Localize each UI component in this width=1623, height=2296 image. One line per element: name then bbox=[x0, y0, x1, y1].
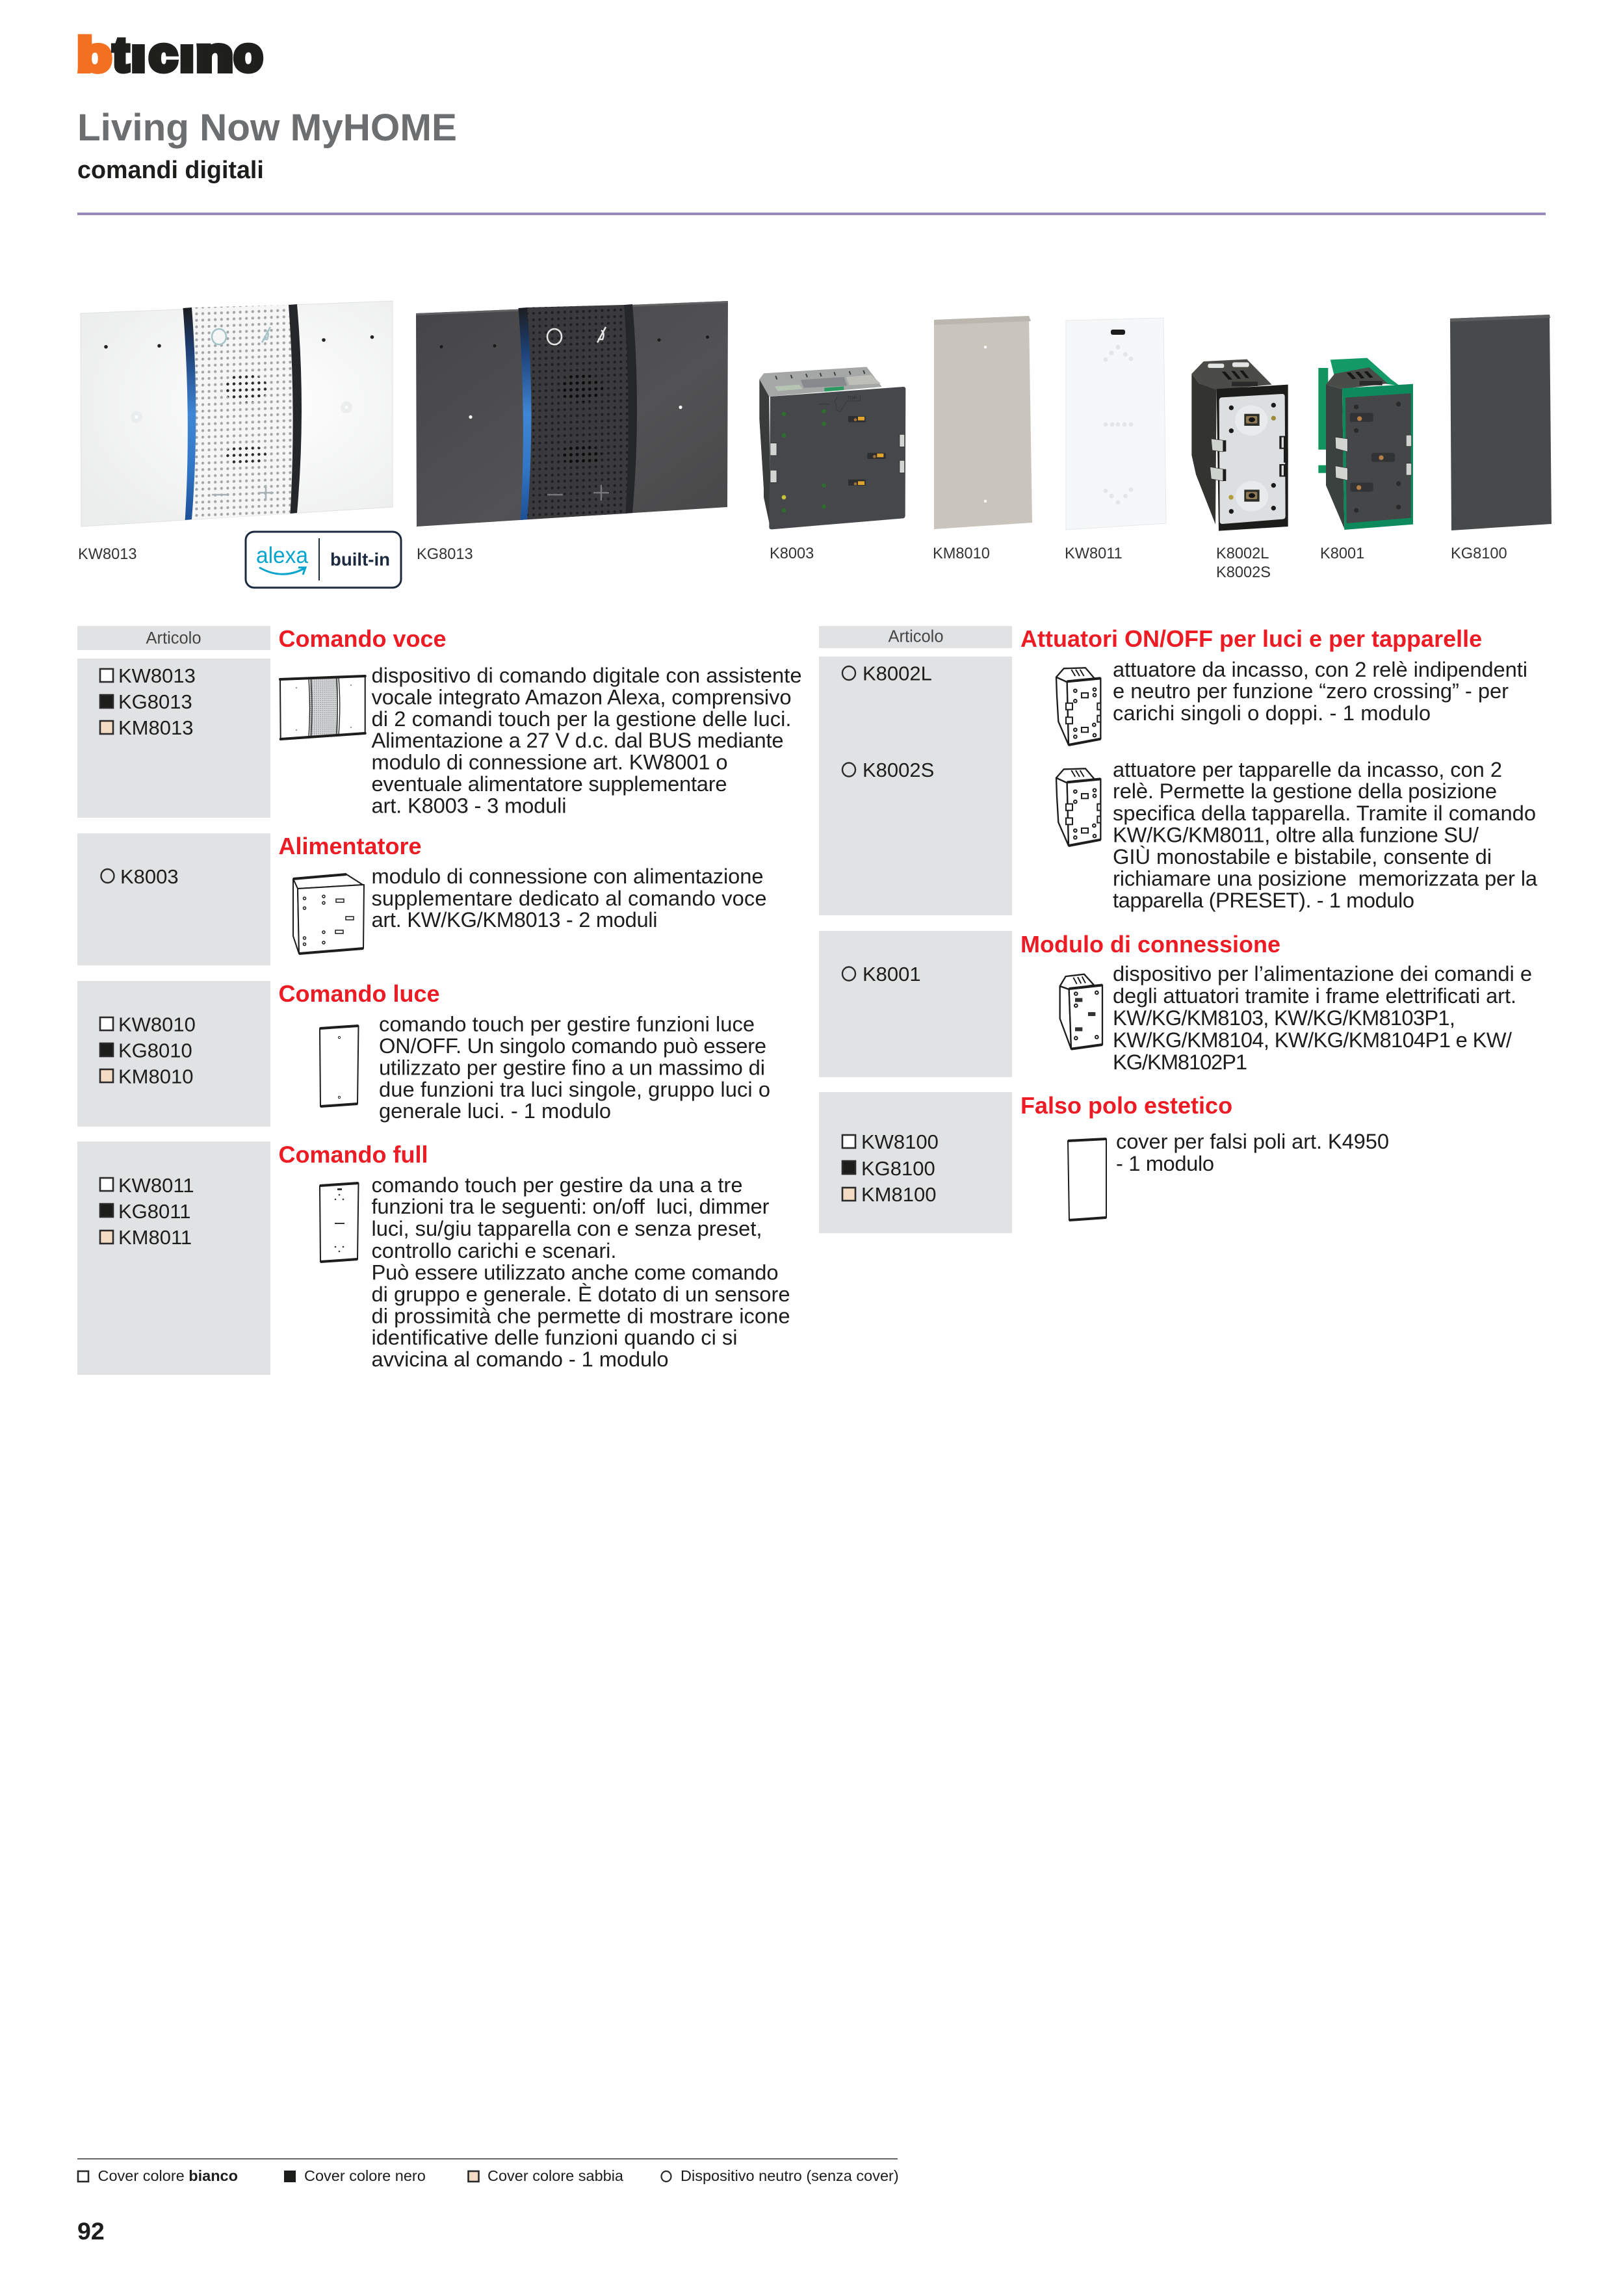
photo: K8001 connection module bbox=[1318, 358, 1413, 530]
photo: KM8010 sand cover bbox=[934, 316, 1032, 529]
text: Comando full description: comando touch per gestire da una a tre bbox=[372, 1173, 742, 1197]
heading: Comando voce: Comando voce bbox=[278, 625, 447, 652]
text: Comando voce description: eventuale alimentatore supplementare bbox=[372, 772, 727, 796]
legend: Cover colore bianco bbox=[97, 2167, 238, 2184]
panel: KW/KG/KM8100 codes: KM8100 bbox=[861, 1183, 936, 1206]
text: K8001 description: degli attuatori tramite i frame elettrificati art. bbox=[1113, 984, 1516, 1008]
icon: voice command bbox=[280, 676, 365, 739]
text: Comando luce description: generale luci. - 1 modulo bbox=[379, 1099, 611, 1123]
heading: Comando full: Comando full bbox=[278, 1141, 428, 1168]
legend: Cover colore nero bbox=[304, 2167, 426, 2184]
text: Alimentatore description: art. KW/KG/KM8013 - 2 moduli bbox=[372, 907, 658, 932]
text: Falso polo description: cover per falsi poli art. K4950 bbox=[1116, 1129, 1389, 1153]
text: Comando full description: controllo carichi e scenari. bbox=[372, 1238, 616, 1262]
panel: KW/KG/KM8013 codes: KM8013 bbox=[118, 716, 193, 739]
text: Falso polo description: - 1 modulo bbox=[1116, 1151, 1214, 1175]
text: Alimentatore description: modulo di connessione con alimentazione bbox=[372, 864, 763, 888]
photo: K8003 power module: TOP bbox=[847, 395, 857, 400]
text: Comando voce description: vocale integrato Amazon Alexa, comprensivo bbox=[372, 685, 792, 709]
text: Comando full description: identificative delle funzioni quando ci si bbox=[372, 1325, 737, 1350]
text: K8001 description bbox=[1113, 961, 1532, 1074]
panel: article header left bbox=[77, 626, 270, 650]
panel: KW/KG/KM8010 codes bbox=[77, 981, 270, 1127]
legend: Cover colore sabbia bbox=[487, 2167, 624, 2184]
photo labels: K8003 bbox=[770, 545, 814, 562]
legend: Dispositivo neutro (senza cover) bbox=[681, 2167, 899, 2184]
text: K8002S description: GIÙ monostabile e bistabile, consente di bbox=[1113, 844, 1492, 868]
photo: KW8013 white voice command bbox=[81, 301, 393, 527]
text: Comando luce description bbox=[379, 1011, 770, 1123]
panel: KW/KG/KM8013 codes: KW8013 bbox=[118, 664, 196, 687]
icon: connection module bbox=[1060, 974, 1102, 1049]
text: K8002S description: attuatore per tapparelle da incasso, con 2 bbox=[1113, 757, 1502, 781]
panel: KW/KG/KM8100 codes: KW8100 bbox=[861, 1130, 939, 1153]
text: K8002S description: tapparella (PRESET). - 1 modulo bbox=[1113, 888, 1414, 912]
badge: alexa built-in bbox=[246, 532, 401, 588]
photo labels: K8002S bbox=[1216, 564, 1271, 581]
photo: KG8100 dark cover bbox=[1450, 315, 1552, 530]
panel: K8003 code bbox=[77, 833, 270, 965]
text: Comando full description: avvicina al comando - 1 modulo bbox=[372, 1347, 668, 1371]
panel: K8002L K8002S codes: K8002L bbox=[863, 662, 932, 685]
title: Living Now MyHOME bbox=[77, 107, 457, 149]
page number: 92 bbox=[77, 2217, 105, 2245]
logo: bticino: n bbox=[196, 29, 233, 81]
heading: Falso polo estetico: Falso polo estetico bbox=[1020, 1092, 1232, 1119]
logo: bticino: b bbox=[77, 29, 112, 81]
panel: K8002L K8002S codes: K8002S bbox=[863, 759, 934, 781]
panel: article header right bbox=[819, 626, 1012, 648]
text: Comando full description bbox=[372, 1173, 790, 1371]
photo labels: KW8011 bbox=[1065, 545, 1123, 562]
text: Comando voce description: Alimentazione a 27 V d.c. dal BUS mediante bbox=[372, 728, 784, 752]
legend bbox=[78, 2167, 899, 2184]
text: Comando full description: funzioni tra le seguenti: on/off luci, dimmer bbox=[372, 1194, 770, 1218]
photo labels: KW8013 bbox=[78, 546, 136, 563]
panel: KW/KG/KM8011 codes: KM8011 bbox=[118, 1226, 192, 1249]
text: K8001 description: KW/KG/KM8104, KW/KG/KM8104P1 e KW/ bbox=[1113, 1028, 1513, 1052]
photo labels: K8001 bbox=[1320, 545, 1364, 562]
text: K8002L description: e neutro per funzione “zero crossing” - per bbox=[1113, 679, 1509, 703]
heading: Attuatori ON/OFF: Attuatori ON/OFF per luci e per tapparelle bbox=[1020, 625, 1482, 652]
heading: Comando luce: Comando luce bbox=[278, 980, 440, 1007]
text: K8002L description: carichi singoli o doppi. - 1 modulo bbox=[1113, 701, 1431, 725]
text: K8002S description bbox=[1113, 757, 1538, 912]
logo: bticino: c bbox=[149, 29, 177, 81]
panel: KW/KG/KM8010 codes: KM8010 bbox=[118, 1065, 193, 1088]
subtitle: comandi digitali bbox=[77, 156, 264, 183]
panel: article header left: Articolo bbox=[146, 629, 201, 647]
text: Comando voce description: dispositivo di comando digitale con assistente bbox=[372, 663, 802, 687]
text: K8002S description: richiamare una posizione memorizzata per la bbox=[1113, 866, 1538, 891]
text: Comando full description: di prossimità che permette di mostrare icone bbox=[372, 1304, 790, 1327]
text: K8002S description: relè. Permette la gestione della posizione bbox=[1113, 779, 1497, 803]
logo: bticino: o bbox=[234, 29, 263, 81]
text: K8002L description: attuatore da incasso, con 2 relè indipendenti bbox=[1113, 657, 1527, 681]
photo labels: KG8013 bbox=[417, 546, 473, 563]
photo labels: K8002L bbox=[1216, 545, 1269, 562]
panel: KW/KG/KM8011 codes: KG8011 bbox=[118, 1200, 190, 1223]
text: K8002S description: specifica della tapparella. Tramite il comando bbox=[1113, 801, 1536, 825]
panel: KW/KG/KM8010 codes: KG8010 bbox=[118, 1039, 192, 1062]
panel: K8001 code bbox=[819, 931, 1012, 1077]
badge: alexa built-in: alexa bbox=[256, 543, 309, 568]
panel: KW/KG/KM8011 codes bbox=[77, 1141, 270, 1375]
badge: alexa built-in: built-in bbox=[330, 549, 390, 569]
panel: KW/KG/KM8010 codes: KW8010 bbox=[118, 1013, 196, 1036]
logo: bticino bbox=[77, 34, 264, 74]
text: Falso polo description bbox=[1116, 1129, 1389, 1175]
panel: KW/KG/KM8100 codes: KG8100 bbox=[861, 1157, 935, 1180]
photo labels: KG8100 bbox=[1451, 545, 1507, 562]
icon: full command bbox=[320, 1183, 359, 1262]
text: K8002S description: KW/KG/KM8011, oltre alla funzione SU/ bbox=[1113, 823, 1479, 846]
text: Comando luce description: ON/OFF. Un singolo comando può essere bbox=[379, 1034, 766, 1058]
text: K8002L description bbox=[1113, 657, 1527, 725]
text: Comando luce description: due funzioni tra luci singole, gruppo luci o bbox=[379, 1077, 770, 1101]
text: Comando full description: Può essere utilizzato anche come comando bbox=[372, 1260, 779, 1285]
text: Alimentatore description: supplementare dedicato al comando voce bbox=[372, 886, 767, 910]
logo: bticino: i bbox=[131, 29, 146, 81]
photo labels: KM8010 bbox=[933, 545, 990, 562]
heading: Alimentatore: Alimentatore bbox=[278, 833, 422, 859]
photo labels bbox=[78, 545, 1507, 581]
text: Comando luce description: utilizzato per gestire fino a un massimo di bbox=[379, 1056, 765, 1079]
text: K8001 description: KG/KM8102P1 bbox=[1113, 1050, 1247, 1074]
photo: KW8011 white cover bbox=[1066, 318, 1166, 530]
icon: light command bbox=[320, 1026, 359, 1106]
panel: KW/KG/KM8013 codes bbox=[77, 659, 270, 818]
panel: KW/KG/KM8100 codes bbox=[819, 1092, 1012, 1233]
icon: blank cover bbox=[1068, 1139, 1106, 1220]
icon: actuator K8002S bbox=[1056, 768, 1100, 846]
text: Comando voce description: modulo di connessione art. KW8001 o bbox=[372, 750, 728, 774]
panel: K8003 code: K8003 bbox=[120, 865, 179, 888]
text: Comando voce description bbox=[372, 663, 802, 818]
panel: article header right: Articolo bbox=[888, 628, 944, 646]
panel: K8002L K8002S codes bbox=[819, 657, 1012, 915]
heading: Modulo di connessione: Modulo di connessione bbox=[1020, 931, 1280, 958]
icon: power module bbox=[293, 874, 364, 954]
text: K8001 description: KW/KG/KM8103, KW/KG/KM8103P1, bbox=[1113, 1006, 1455, 1030]
icon: actuator K8002L bbox=[1056, 668, 1100, 745]
text: Comando full description: luci, su/giu tapparella con e senza preset, bbox=[372, 1216, 762, 1240]
logo: bticino: i bbox=[179, 29, 194, 81]
text: Comando full description: di gruppo e generale. È dotato di un sensore bbox=[372, 1282, 790, 1306]
panel: KW/KG/KM8013 codes: KG8013 bbox=[118, 690, 192, 713]
photo: K8003 power module bbox=[759, 367, 905, 529]
logo: bticino: t bbox=[113, 29, 129, 81]
text: Comando voce description: art. K8003 - 3 moduli bbox=[372, 793, 567, 818]
photo: KG8013 dark voice command bbox=[416, 301, 728, 527]
panel: K8001 code: K8001 bbox=[863, 963, 921, 985]
photo: K8002 actuator bbox=[1191, 359, 1288, 531]
panel: KW/KG/KM8011 codes: KW8011 bbox=[118, 1174, 194, 1197]
text: Comando luce description: comando touch per gestire funzioni luce bbox=[379, 1011, 755, 1036]
text: Alimentatore description bbox=[372, 864, 767, 932]
text: K8001 description: dispositivo per l’alimentazione dei comandi e bbox=[1113, 961, 1532, 985]
text: Comando voce description: di 2 comandi touch per la gestione delle luci. bbox=[372, 707, 792, 731]
